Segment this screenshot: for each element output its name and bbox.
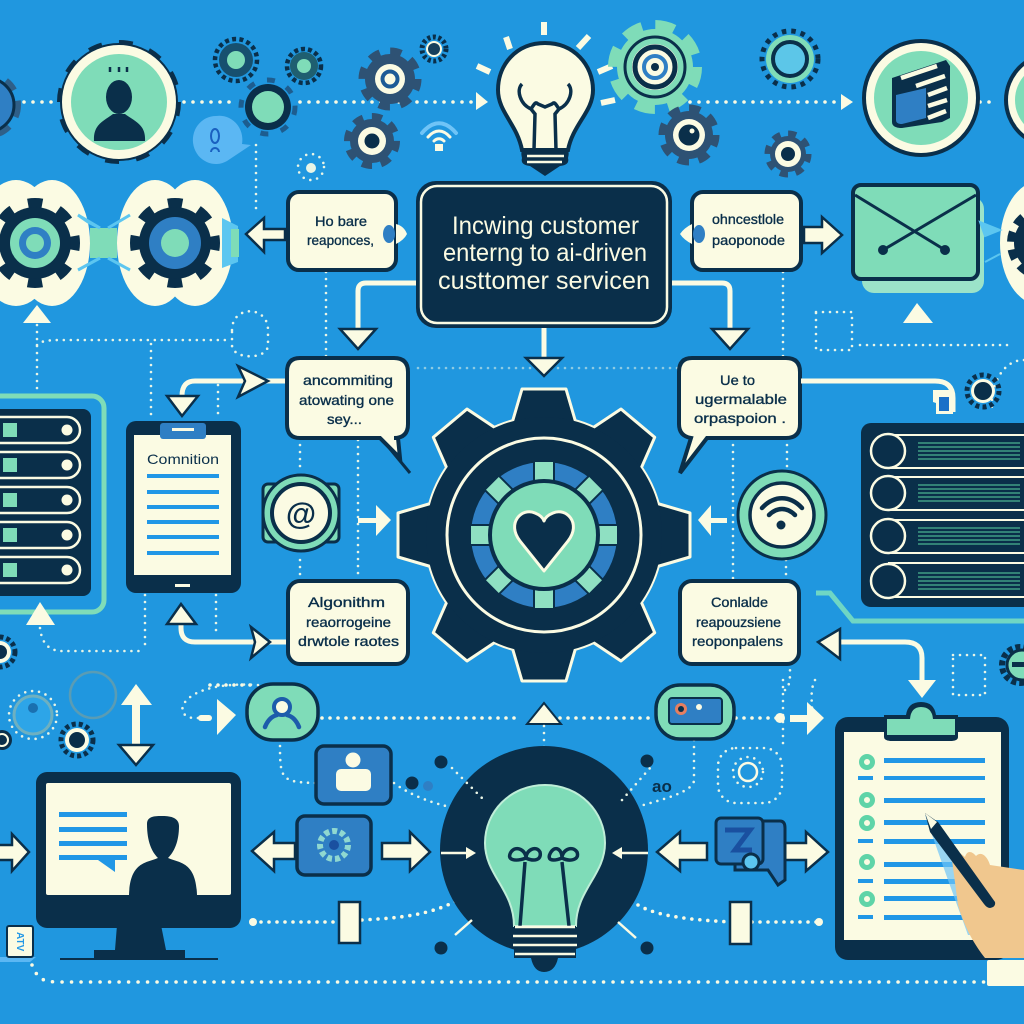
icon: mint gear xyxy=(614,26,696,108)
arrow: left from gear card xyxy=(252,832,295,871)
icon: central small mint gear xyxy=(241,80,295,134)
pen shadow xyxy=(925,815,985,935)
heart xyxy=(515,512,573,571)
icon: gear blue card xyxy=(297,816,371,875)
icon: dotted gear right xyxy=(762,31,818,87)
icon: bottom bulb in navy circle xyxy=(440,746,648,972)
icon: dark gear with eye xyxy=(348,117,396,165)
icon: dark gear with cream hub xyxy=(363,52,417,106)
icon: top light bulb xyxy=(477,22,615,176)
rectangle node right xyxy=(730,902,751,944)
arrow: up from bulb xyxy=(527,703,561,770)
icon: at-sign gear: @ xyxy=(286,496,316,531)
icon: wifi circle xyxy=(738,471,826,559)
icon: package circle xyxy=(864,41,978,155)
text box: left lower: drwtole raotes xyxy=(298,633,399,649)
rectangle node left xyxy=(339,902,360,943)
checklist rows xyxy=(858,756,985,920)
dot start and end xyxy=(249,918,823,926)
text box: top left xyxy=(288,192,407,270)
icon: small gear right xyxy=(967,375,999,407)
speech box: right upper: ugermalable xyxy=(695,391,787,407)
icons: satellite nodes around bulb xyxy=(406,754,654,954)
line: mint connector xyxy=(816,593,1024,621)
central heading box: Incwing customer xyxy=(452,212,639,240)
icon: partial gear lower right xyxy=(1002,647,1024,683)
speech box: left upper xyxy=(287,358,410,473)
pen xyxy=(925,813,995,908)
small arrows in circle xyxy=(441,852,468,854)
icon: right server rack xyxy=(861,423,1024,607)
icon: tablet xyxy=(126,421,241,593)
icon: dark gear with eye 2 xyxy=(663,109,715,161)
text box: top right xyxy=(680,192,801,270)
text box: right lower: Conlalde xyxy=(711,594,768,610)
arrow head: up to server xyxy=(26,602,55,625)
icon: small card: ATV xyxy=(14,932,25,952)
icon: tiny gear xyxy=(422,37,446,61)
person silhouette xyxy=(129,816,197,895)
icon: small card xyxy=(0,926,36,962)
icon: clipboard with hand xyxy=(835,702,1024,986)
gear 2 blob xyxy=(117,180,233,306)
icon: dotted gear 2 xyxy=(287,49,321,83)
text box: right lower xyxy=(680,581,799,664)
text box: left lower: Algonithm xyxy=(308,594,385,610)
speech box: right upper: orpaspoion . xyxy=(694,410,786,426)
arrow head: up left xyxy=(23,305,51,323)
text box: left lower: reaorrogeine xyxy=(306,614,391,630)
arrow: right from puzzle to clipboard xyxy=(785,832,828,871)
line: box to bracket xyxy=(801,381,953,414)
clip xyxy=(884,702,958,741)
central gear xyxy=(398,389,690,681)
speech box: right upper: Ue to xyxy=(720,372,755,388)
icon: monitor with person xyxy=(36,772,241,960)
arrow: wifi to gear xyxy=(698,505,727,536)
icon: partial gear right xyxy=(1006,54,1024,146)
arrow: box to envelope xyxy=(804,217,842,253)
arrow: into customer blob xyxy=(198,699,236,735)
icon: dashed rounded square with ring xyxy=(718,748,782,803)
arrow: left from puzzle xyxy=(657,832,707,871)
text box: right lower: reoponpalens xyxy=(692,633,783,649)
tablet title: Comnition xyxy=(147,451,219,467)
icon: partial gear left xyxy=(0,637,15,667)
icon: small wifi xyxy=(422,123,456,151)
icon: customer mint badge xyxy=(247,684,318,740)
arrow: box to tablet (upper) xyxy=(167,366,287,416)
icon: at-sign gear xyxy=(263,475,339,551)
speech box: left upper: atowating one xyxy=(299,392,394,408)
central heading box xyxy=(416,181,672,328)
gear link xyxy=(90,228,117,258)
speech box: right upper xyxy=(679,358,800,473)
arrow: tablet to box (lower) xyxy=(167,604,287,658)
icon: chat bubble xyxy=(193,116,251,164)
icon: left double gears xyxy=(0,180,239,306)
arrow: lower right dots to clipboard xyxy=(775,702,824,735)
icon: customer profile gear xyxy=(59,42,179,162)
central heading box: custtomer servicen xyxy=(438,267,650,295)
icon: dark gear small xyxy=(768,134,808,174)
icon: partial blob right xyxy=(980,181,1024,305)
text box: top right: paoponode xyxy=(712,232,785,248)
chat lines xyxy=(59,812,127,872)
icon: dotted ring xyxy=(298,154,324,180)
arrow: right to bulb xyxy=(382,832,430,871)
icon: envelope xyxy=(853,185,984,293)
icon: dotted gear 1 xyxy=(215,39,257,81)
sleeve xyxy=(987,960,1024,986)
gear 1 blob xyxy=(0,180,90,306)
icon: faded gears lower left xyxy=(0,672,116,756)
text box: left lower xyxy=(288,581,408,664)
icon: partial gear top left xyxy=(0,75,17,135)
text box: top left: reaponces, xyxy=(307,232,374,248)
arrow: into right lower box xyxy=(818,629,936,698)
text box: top right: ohncestlole xyxy=(712,211,784,227)
icon: puzzle cards xyxy=(716,818,785,885)
icon: person blue card xyxy=(316,746,391,804)
arrows: heading to lower boxes xyxy=(340,283,748,376)
arrow head: top right xyxy=(841,94,853,110)
text box: top left: Ho bare xyxy=(315,213,367,229)
speech box: left upper: sey... xyxy=(327,411,362,427)
arrow head: up to envelope xyxy=(903,303,933,323)
text box: right lower: reapouzsiene xyxy=(696,614,781,630)
arrow: at-sign to gear xyxy=(358,505,391,536)
arrow head: into top bulb xyxy=(476,92,488,110)
arrow: box to gears xyxy=(246,218,285,252)
speech box: left upper: ancommiting xyxy=(303,372,393,388)
hand xyxy=(952,852,1024,958)
icon: mint device badge xyxy=(656,685,734,739)
central heading box: enterng to ai-driven xyxy=(443,239,647,267)
arrow: double vertical xyxy=(119,684,153,765)
icon: left server rack xyxy=(0,396,104,612)
arrow: into monitor xyxy=(0,834,29,871)
small label near bulb: ao xyxy=(652,777,672,796)
